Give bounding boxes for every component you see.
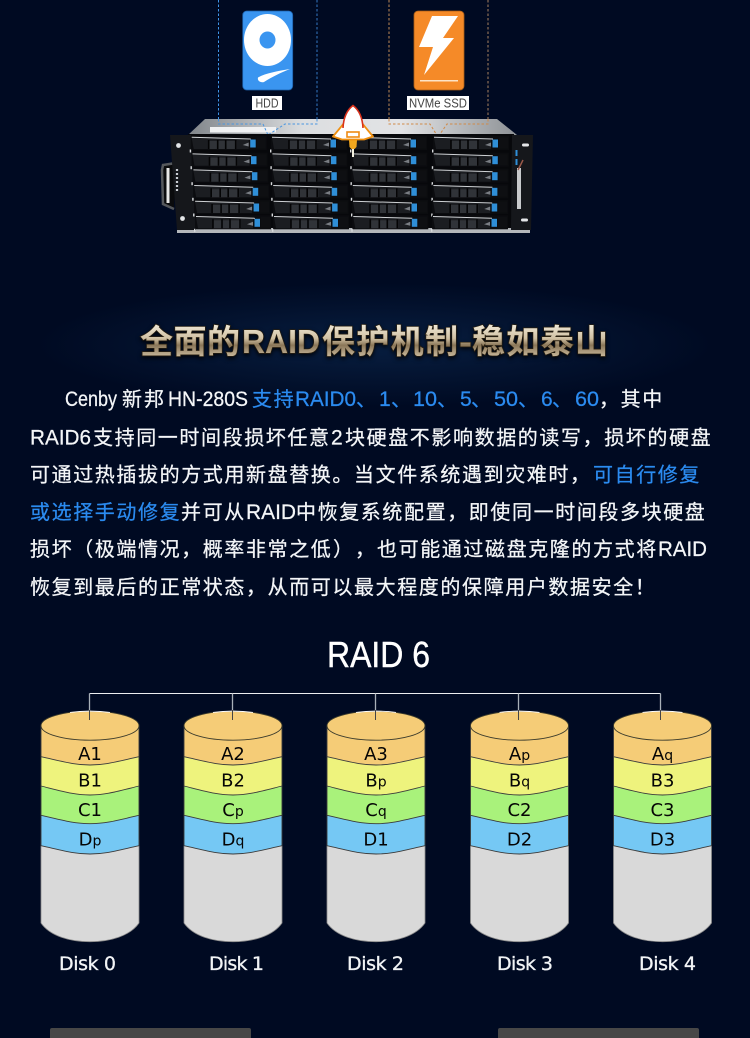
text block: RAID description: RAID <box>246 501 296 524</box>
text block: RAID description: Cenby <box>65 388 117 411</box>
text block: RAID description: 1 <box>379 388 391 411</box>
text block: RAID description: 也可能通过磁盘克隆的方式将 <box>377 538 658 561</box>
text block: RAID description: 、 <box>518 389 540 411</box>
disk 0: A1 <box>78 744 102 765</box>
text block: RAID description: 6 <box>541 388 553 411</box>
text block: RAID description: 新邦 <box>122 388 166 411</box>
right rack ear <box>511 135 533 230</box>
chassis front <box>188 134 514 230</box>
disk 3: Bq <box>509 771 530 792</box>
disk 4 <box>614 710 712 975</box>
text block: RAID description: 损坏（极端情况，概率非常之低 <box>30 538 332 561</box>
title glow <box>35 283 715 407</box>
heading: RAID protection <box>140 323 608 360</box>
text block: RAID description: 、 <box>356 389 378 411</box>
disk 1: Dq <box>222 830 244 851</box>
heading: RAID protection: - <box>459 323 472 360</box>
text block: RAID description: 恢复到最后的正常状态，从而可以最大程度的保障用户数据安全！ <box>30 576 656 599</box>
text block: RAID description: HN-280S <box>168 388 248 411</box>
text block: RAID description: 支持 <box>252 388 295 411</box>
text block: RAID description: 5 <box>460 388 472 411</box>
text block: RAID description: 并可从 <box>181 501 246 524</box>
text block: RAID description: 、 <box>552 389 574 411</box>
heading: RAID protection: 保护机制 <box>322 323 458 360</box>
text block: RAID description: 或选择手动修复 <box>30 501 181 524</box>
icon: HDD <box>243 11 293 90</box>
disk 0: B1 <box>78 771 102 792</box>
disk 2: A3 <box>364 744 388 765</box>
disk 4: B3 <box>651 771 674 792</box>
text block: RAID description: 、 <box>391 389 413 411</box>
server chassis <box>162 119 533 233</box>
text block: RAID description: ，其中 <box>599 388 664 411</box>
disk 4: Disk 4 <box>639 953 696 975</box>
disk 0: Disk 0 <box>59 953 116 975</box>
text block: RAID description: 、 <box>437 389 459 411</box>
bottom tab left <box>50 1028 251 1038</box>
left rack ear <box>162 135 196 230</box>
disk 2: Disk 2 <box>347 953 404 975</box>
disk 2: D1 <box>363 830 389 851</box>
disk 2: Bp <box>365 771 387 792</box>
disk 1 <box>184 710 282 975</box>
label: NVMe SSD: NVMe SSD <box>409 96 467 110</box>
text block: RAID description: 60 <box>575 388 599 411</box>
disk 1: A2 <box>221 744 245 765</box>
connector lines <box>90 694 660 712</box>
text block: RAID description: 块硬盘不影响数据的读写，损坏的硬盘 <box>345 426 712 450</box>
heading: RAID protection: 稳如泰山 <box>472 323 608 360</box>
disk 4: C3 <box>650 800 675 821</box>
disk 0: C1 <box>78 800 102 821</box>
text block: RAID description: 、 <box>471 389 493 411</box>
label: HDD: HDD <box>256 96 278 110</box>
text block: RAID description: 2 <box>331 426 343 450</box>
text block: RAID description: RAID <box>658 538 707 561</box>
text block: RAID description: ， <box>355 539 377 561</box>
disk 1: Cp <box>222 800 244 821</box>
text block: RAID description: 10 <box>413 388 437 411</box>
disk 3 <box>470 710 568 975</box>
disk 4: D3 <box>650 830 675 851</box>
disk 1: Disk 1 <box>209 953 264 975</box>
disk 2: Cq <box>365 800 387 821</box>
chassis top plate <box>188 119 517 135</box>
disk 3: D2 <box>507 830 532 851</box>
heading: RAID 6: RAID 6 <box>327 634 430 675</box>
storage types connection lines <box>218 0 488 119</box>
disk 0 <box>41 710 139 975</box>
drive bays <box>190 136 509 232</box>
text block: RAID description: 中恢复系统配置，即使同一时间段多块硬盘 <box>296 501 706 524</box>
disk 2 <box>327 710 425 975</box>
disk 3: C2 <box>507 800 532 821</box>
text block: RAID description: 50 <box>494 388 518 411</box>
icon: NVMe SSD <box>414 11 464 90</box>
text block: RAID description: 可通过热插拔的方式用新盘替换。当文件系统遇到灾难时， <box>30 464 592 486</box>
heading: RAID protection: RAID <box>242 323 320 360</box>
disk 3: Ap <box>509 744 530 765</box>
text block: RAID description: 可自行修复 <box>593 464 701 486</box>
disk 3: Disk 3 <box>497 953 553 975</box>
text block: RAID description: RAID6 <box>30 426 91 450</box>
disk 4: Aq <box>652 744 673 765</box>
text block: RAID description: RAID0 <box>295 388 356 411</box>
text block: RAID description <box>30 388 712 599</box>
text block: RAID description: 支持同一时间段损坏任意 <box>93 426 331 450</box>
heading: RAID protection: 全面的 <box>140 323 240 360</box>
disk 0: Dp <box>79 830 101 851</box>
text block: RAID description: ） <box>333 538 355 561</box>
disk 1: B2 <box>221 771 245 792</box>
icon: rocket <box>333 106 373 157</box>
bottom tab right <box>498 1028 699 1038</box>
